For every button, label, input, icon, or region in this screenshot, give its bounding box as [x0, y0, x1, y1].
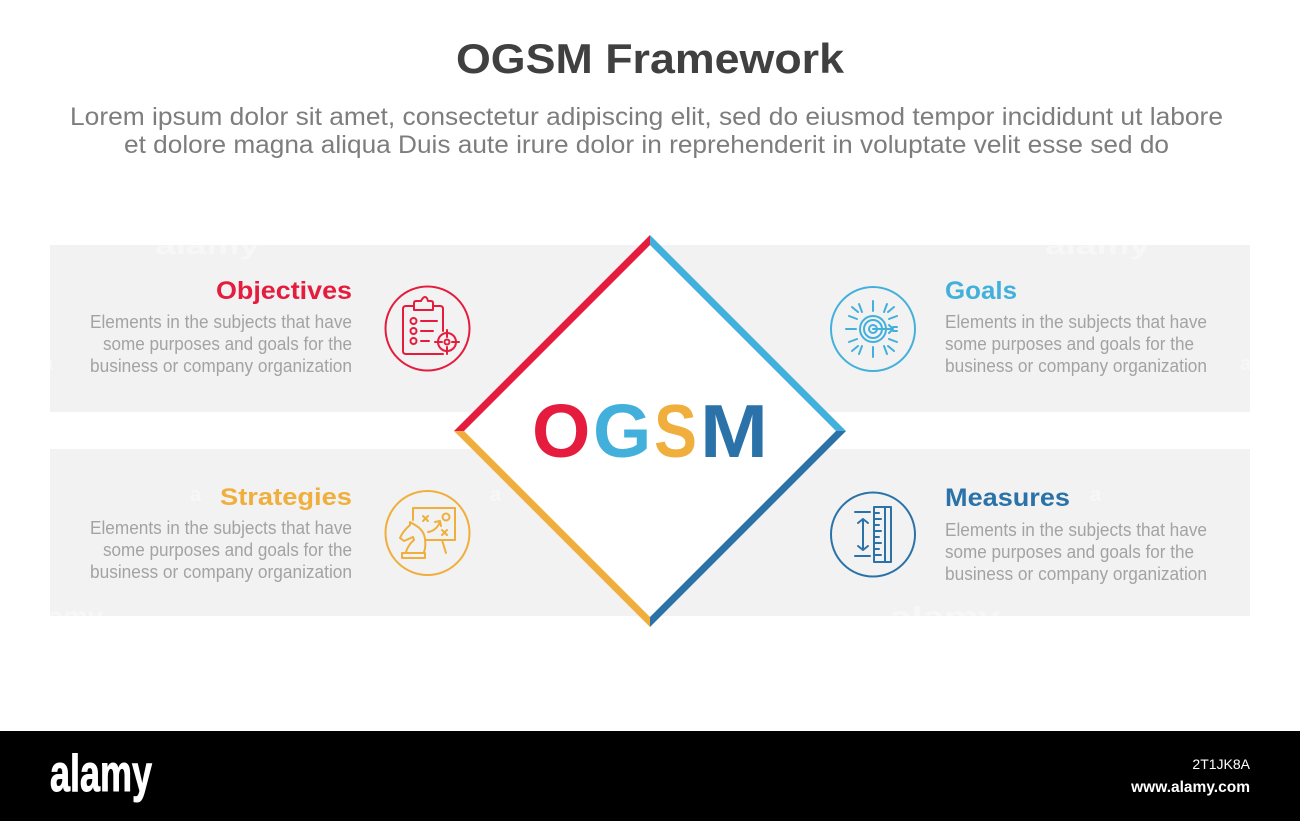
- text: alamy: [1045, 230, 1151, 260]
- panel: measures text: [945, 484, 1207, 584]
- panel: bottom band: [50, 449, 1250, 616]
- panel: top band: [50, 245, 1250, 412]
- panel: objectives text: business or company organization: [90, 356, 352, 376]
- panel: measures text: some purposes and goals for the: [945, 542, 1194, 562]
- text: a: [490, 484, 502, 506]
- footer bar: [0, 731, 1300, 821]
- text: a: [42, 353, 54, 375]
- panel: measures text: Measures: [945, 484, 1070, 512]
- panel: goals text: [945, 277, 1207, 376]
- intro text: Lorem ipsum dolor sit amet, consectetur adipiscing elit, sed do eiusmod tempor incididunt ut labore: [70, 103, 1223, 131]
- icon: measures ruler: [831, 492, 915, 576]
- panel: measures text: business or company organization: [945, 564, 1207, 584]
- OGSM wordmark: G: [593, 389, 651, 473]
- OGSM wordmark: O: [532, 389, 590, 473]
- icon: objectives clipboard: [386, 286, 470, 370]
- panel: strategies text: Strategies: [220, 484, 352, 511]
- panel: goals text: Goals: [945, 277, 1017, 305]
- panel: goals text: Elements in the subjects that have: [945, 312, 1207, 332]
- central diamond: [454, 235, 846, 627]
- panel: objectives text: Objectives: [216, 277, 352, 305]
- text: a: [190, 484, 202, 506]
- alamy logo: alamy: [50, 745, 152, 803]
- text: amy: [48, 601, 104, 631]
- OGSM wordmark: S: [654, 389, 697, 473]
- icon: strategies chess knight and board: [386, 491, 470, 575]
- panel: objectives text: [90, 277, 352, 376]
- intro text: [70, 103, 1223, 159]
- panel: goals text: some purposes and goals for the: [945, 334, 1194, 354]
- panel: goals text: business or company organization: [945, 356, 1207, 376]
- panel: objectives text: Elements in the subjects that have: [90, 312, 352, 332]
- panel: strategies text: Elements in the subjects that have: [90, 518, 352, 538]
- OGSM wordmark: M: [700, 389, 768, 473]
- panel: strategies text: [90, 484, 352, 582]
- text: alamy: [155, 230, 261, 260]
- image id: 2T1JK8A: [1192, 756, 1251, 772]
- panel: strategies text: some purposes and goals for the: [103, 540, 352, 560]
- website: www.alamy.com: [1130, 779, 1250, 796]
- title: OGSM Framework: [456, 35, 845, 82]
- text: alamy: [890, 601, 1001, 631]
- panel: strategies text: business or company organization: [90, 562, 352, 582]
- panel: measures text: Elements in the subjects that have: [945, 520, 1207, 540]
- OGSM wordmark: [532, 389, 768, 473]
- icon: goals target: [831, 287, 915, 371]
- panel: objectives text: some purposes and goals for the: [103, 334, 352, 354]
- text: a: [1090, 484, 1102, 506]
- intro text: et dolore magna aliqua Duis aute irure dolor in reprehenderit in voluptate velit esse sed do: [124, 131, 1169, 159]
- text: a: [1240, 353, 1252, 375]
